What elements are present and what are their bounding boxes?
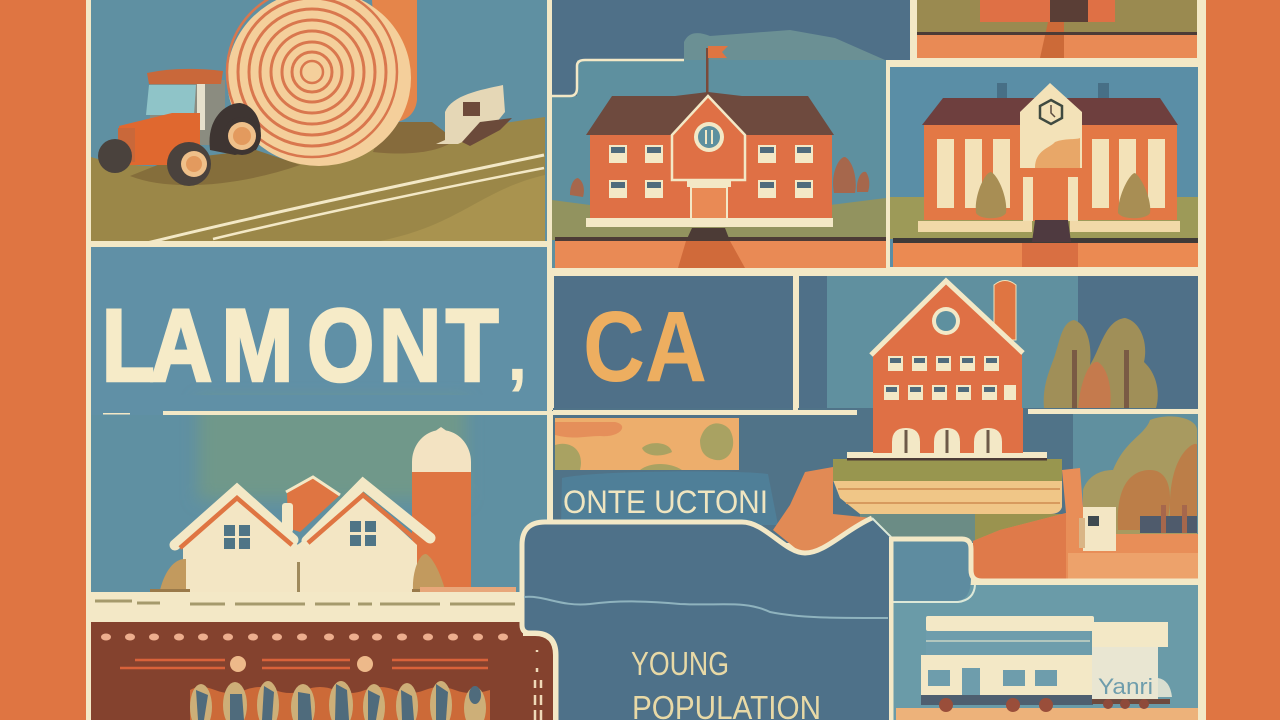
text: young population <box>631 645 821 720</box>
icon: tractor <box>98 69 261 186</box>
icon: truck car <box>1092 622 1172 709</box>
icon: columns <box>937 139 1165 208</box>
fence band <box>91 587 523 623</box>
icon: bushes <box>150 554 450 592</box>
panel: CA label <box>554 276 794 411</box>
icon: trees <box>1044 318 1158 408</box>
icon: silo behind bale <box>372 0 417 123</box>
icon: round window <box>932 307 960 335</box>
icon: windows <box>609 145 813 198</box>
icon: trees <box>570 157 869 197</box>
icon: flag <box>706 46 728 94</box>
panel: title background <box>91 247 547 417</box>
icon: roof <box>922 98 1178 125</box>
panel: top center dark blue with hills <box>552 0 910 96</box>
sign with garbled text: ONTE UCTONI <box>563 484 768 520</box>
icon: tall house lower wall <box>873 408 1023 453</box>
icon: chimneys <box>997 83 1109 99</box>
panel: lower center blue <box>552 408 1198 556</box>
base <box>918 221 1032 232</box>
panel: small teal connector <box>889 539 1200 602</box>
wave line <box>524 597 888 618</box>
panel: top right strip <box>917 0 1197 58</box>
icon: small white shed <box>1079 507 1116 551</box>
sign with garbled text <box>561 471 778 525</box>
icon: trees right <box>1083 416 1197 534</box>
title: CA: CA <box>583 291 707 403</box>
icon: shrubs <box>976 172 1150 218</box>
panel: orange hillside <box>973 468 1198 580</box>
icon: chimney <box>282 503 293 533</box>
title: LAMONT: LAMONT <box>102 288 498 402</box>
icon: window rows <box>884 356 1016 400</box>
base <box>586 218 833 227</box>
text: young population: YOUNG <box>631 645 729 682</box>
icon: right house <box>296 484 430 592</box>
icon: terrace platform <box>833 452 1062 514</box>
panel: brown decorative band <box>91 622 553 720</box>
panel: courthouse building <box>889 67 1198 267</box>
icon: train car <box>921 616 1094 712</box>
figures row <box>190 681 490 720</box>
icon: school roof <box>586 92 834 135</box>
road lines <box>147 155 544 243</box>
panel: train <box>893 585 1200 720</box>
panel: school building <box>552 46 886 268</box>
icon: left house <box>175 490 298 592</box>
ground below terrace <box>860 514 1075 542</box>
icon: tall house <box>873 282 1022 460</box>
panel: central dark blue with wavy top <box>522 518 894 720</box>
map block <box>555 418 739 470</box>
icon: central tower with clock <box>1020 83 1082 221</box>
icon: courthouse body <box>924 125 1177 220</box>
icon: barn roof behind <box>287 477 340 532</box>
icon: harvester machine <box>436 85 512 146</box>
icon: truck car: Yanri <box>1098 674 1153 699</box>
panel: farm with tractor and hay bale <box>91 0 547 243</box>
panel: farmhouses and silo <box>91 395 547 595</box>
icon: school body <box>590 133 832 218</box>
icon: silo <box>412 427 471 588</box>
icon: clock <box>694 122 724 152</box>
icon: hay bale <box>227 0 411 166</box>
icon: chimney <box>994 280 1016 340</box>
small side marks <box>535 650 541 720</box>
title comma: , <box>507 313 528 396</box>
icon: arched windows <box>892 428 1002 453</box>
icon: door <box>687 181 731 223</box>
panel: tall house section <box>799 276 1198 460</box>
icon: cliff <box>773 467 872 556</box>
